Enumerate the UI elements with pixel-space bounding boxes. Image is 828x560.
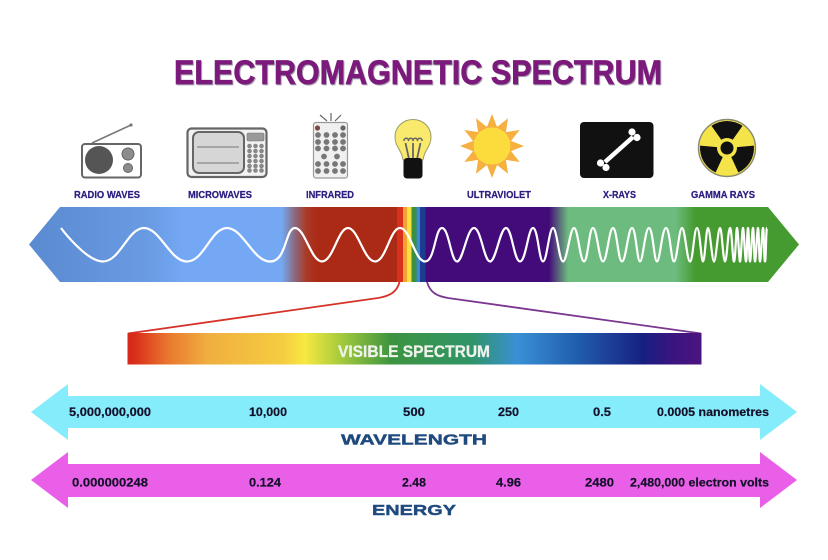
energy values: 0.124	[249, 476, 281, 490]
energy values: 2480	[585, 476, 614, 490]
energy values: 2,480,000 electron volts	[630, 476, 769, 490]
connector: red line	[128, 282, 400, 334]
wavelength values: 5,000,000,000	[69, 405, 151, 419]
energy values: 2.48	[402, 476, 426, 490]
icon: light bulb	[395, 120, 431, 178]
wavelength arrow	[31, 384, 797, 440]
wavelength values: 0.5	[593, 405, 611, 419]
label: ultraviolet: ULTRAVIOLET	[467, 189, 532, 201]
visible spectrum bar	[128, 333, 702, 364]
wavelength heading: WAVELENGTH	[341, 432, 487, 448]
energy values	[72, 476, 769, 490]
icon: microwave	[188, 128, 266, 177]
title: ELECTROMAGNETIC SPECTRUM	[174, 54, 662, 92]
icon: infrared remote	[314, 113, 348, 178]
energy arrow	[31, 452, 797, 508]
label: radio waves: RADIO WAVES	[74, 189, 140, 201]
icon: radiation symbol	[696, 120, 758, 176]
wavelength values: 500	[403, 405, 425, 419]
connector: purple line	[427, 282, 701, 334]
wavelength values: 0.0005 nanometres	[657, 405, 769, 419]
sine wave	[61, 228, 767, 262]
icon: x-ray bone	[580, 122, 654, 178]
label: x-rays: X-RAYS	[603, 189, 636, 201]
wavelength values: 250	[498, 405, 519, 419]
label: gamma rays: GAMMA RAYS	[691, 189, 755, 201]
energy heading: ENERGY	[372, 503, 456, 519]
label: infrared: INFRARED	[306, 189, 354, 201]
wavelength values: 10,000	[249, 405, 287, 419]
spectrum band arrow	[29, 207, 799, 282]
energy values: 0.000000248	[72, 476, 148, 490]
icon: radio	[82, 123, 141, 178]
wavelength values	[69, 405, 769, 419]
icon: sun	[460, 114, 524, 178]
visible spectrum label: VISIBLE SPECTRUM	[338, 343, 490, 361]
energy values: 4.96	[496, 476, 521, 490]
label: microwaves: MICROWAVES	[188, 189, 252, 201]
